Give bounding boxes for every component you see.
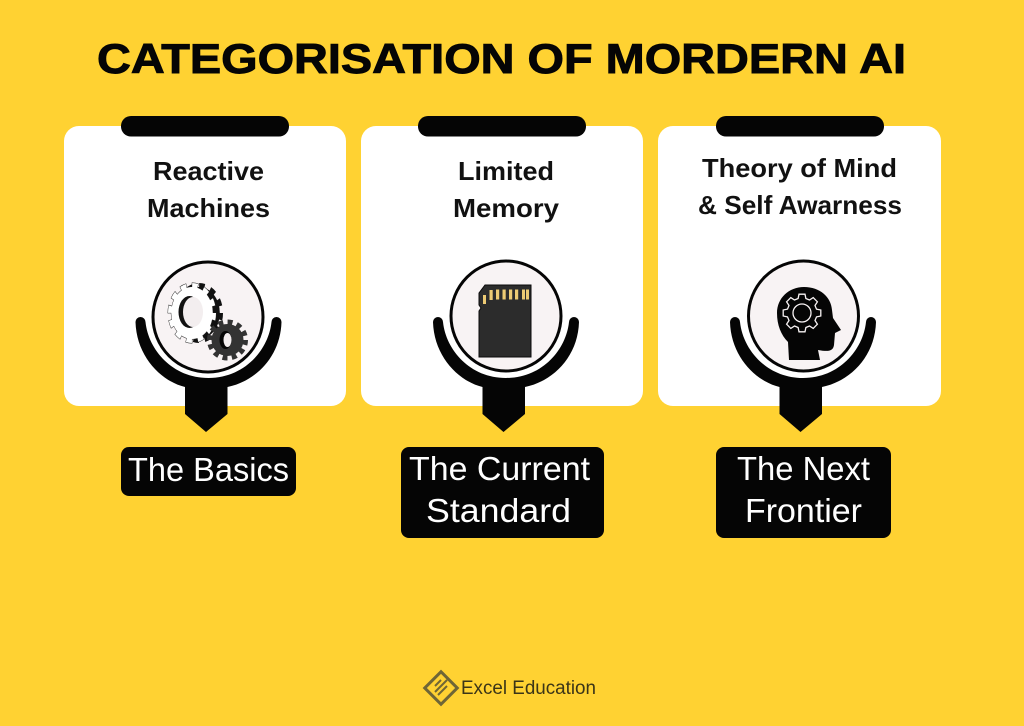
icon: gears — [153, 262, 263, 372]
card background — [361, 126, 643, 406]
label: the next frontier: The Next — [737, 450, 870, 487]
panel: limited memory — [361, 116, 643, 538]
heading: limited memory: Limited — [458, 156, 554, 186]
icon holder cradle — [433, 317, 579, 432]
icon: memory card — [451, 261, 561, 371]
label: the current standard: Standard — [426, 492, 571, 529]
panel: theory of mind and self awareness — [658, 116, 941, 538]
clip bar — [716, 116, 884, 136]
label: the basics: The Basics — [128, 451, 289, 488]
heading: reactive machines: Reactive — [153, 156, 264, 186]
heading: theory of mind and self awarness: Theory of Mind — [702, 153, 897, 183]
heading: limited memory: Memory — [453, 193, 560, 223]
label: the current standard — [401, 447, 604, 538]
brand name: Excel Education — [461, 678, 596, 699]
icon: head with gear — [748, 261, 858, 371]
footer logo: excel education — [425, 672, 596, 704]
icon: diamond logo — [425, 672, 457, 704]
title: CATEGORISATION OF MORDERN AI — [97, 35, 906, 82]
heading: reactive machines: Machines — [147, 193, 270, 223]
label: the next frontier: Frontier — [745, 492, 862, 529]
panel: reactive machines — [64, 116, 346, 496]
icon holder cradle — [730, 317, 876, 432]
clip bar — [121, 116, 289, 136]
clip bar — [418, 116, 586, 136]
card background — [658, 126, 941, 406]
icon holder cradle — [136, 317, 282, 432]
label: the next frontier — [716, 447, 891, 538]
card background — [64, 126, 346, 406]
label: the current standard: The Current — [409, 450, 590, 487]
heading: theory of mind and self awarness: & Self Awarness — [698, 190, 902, 220]
